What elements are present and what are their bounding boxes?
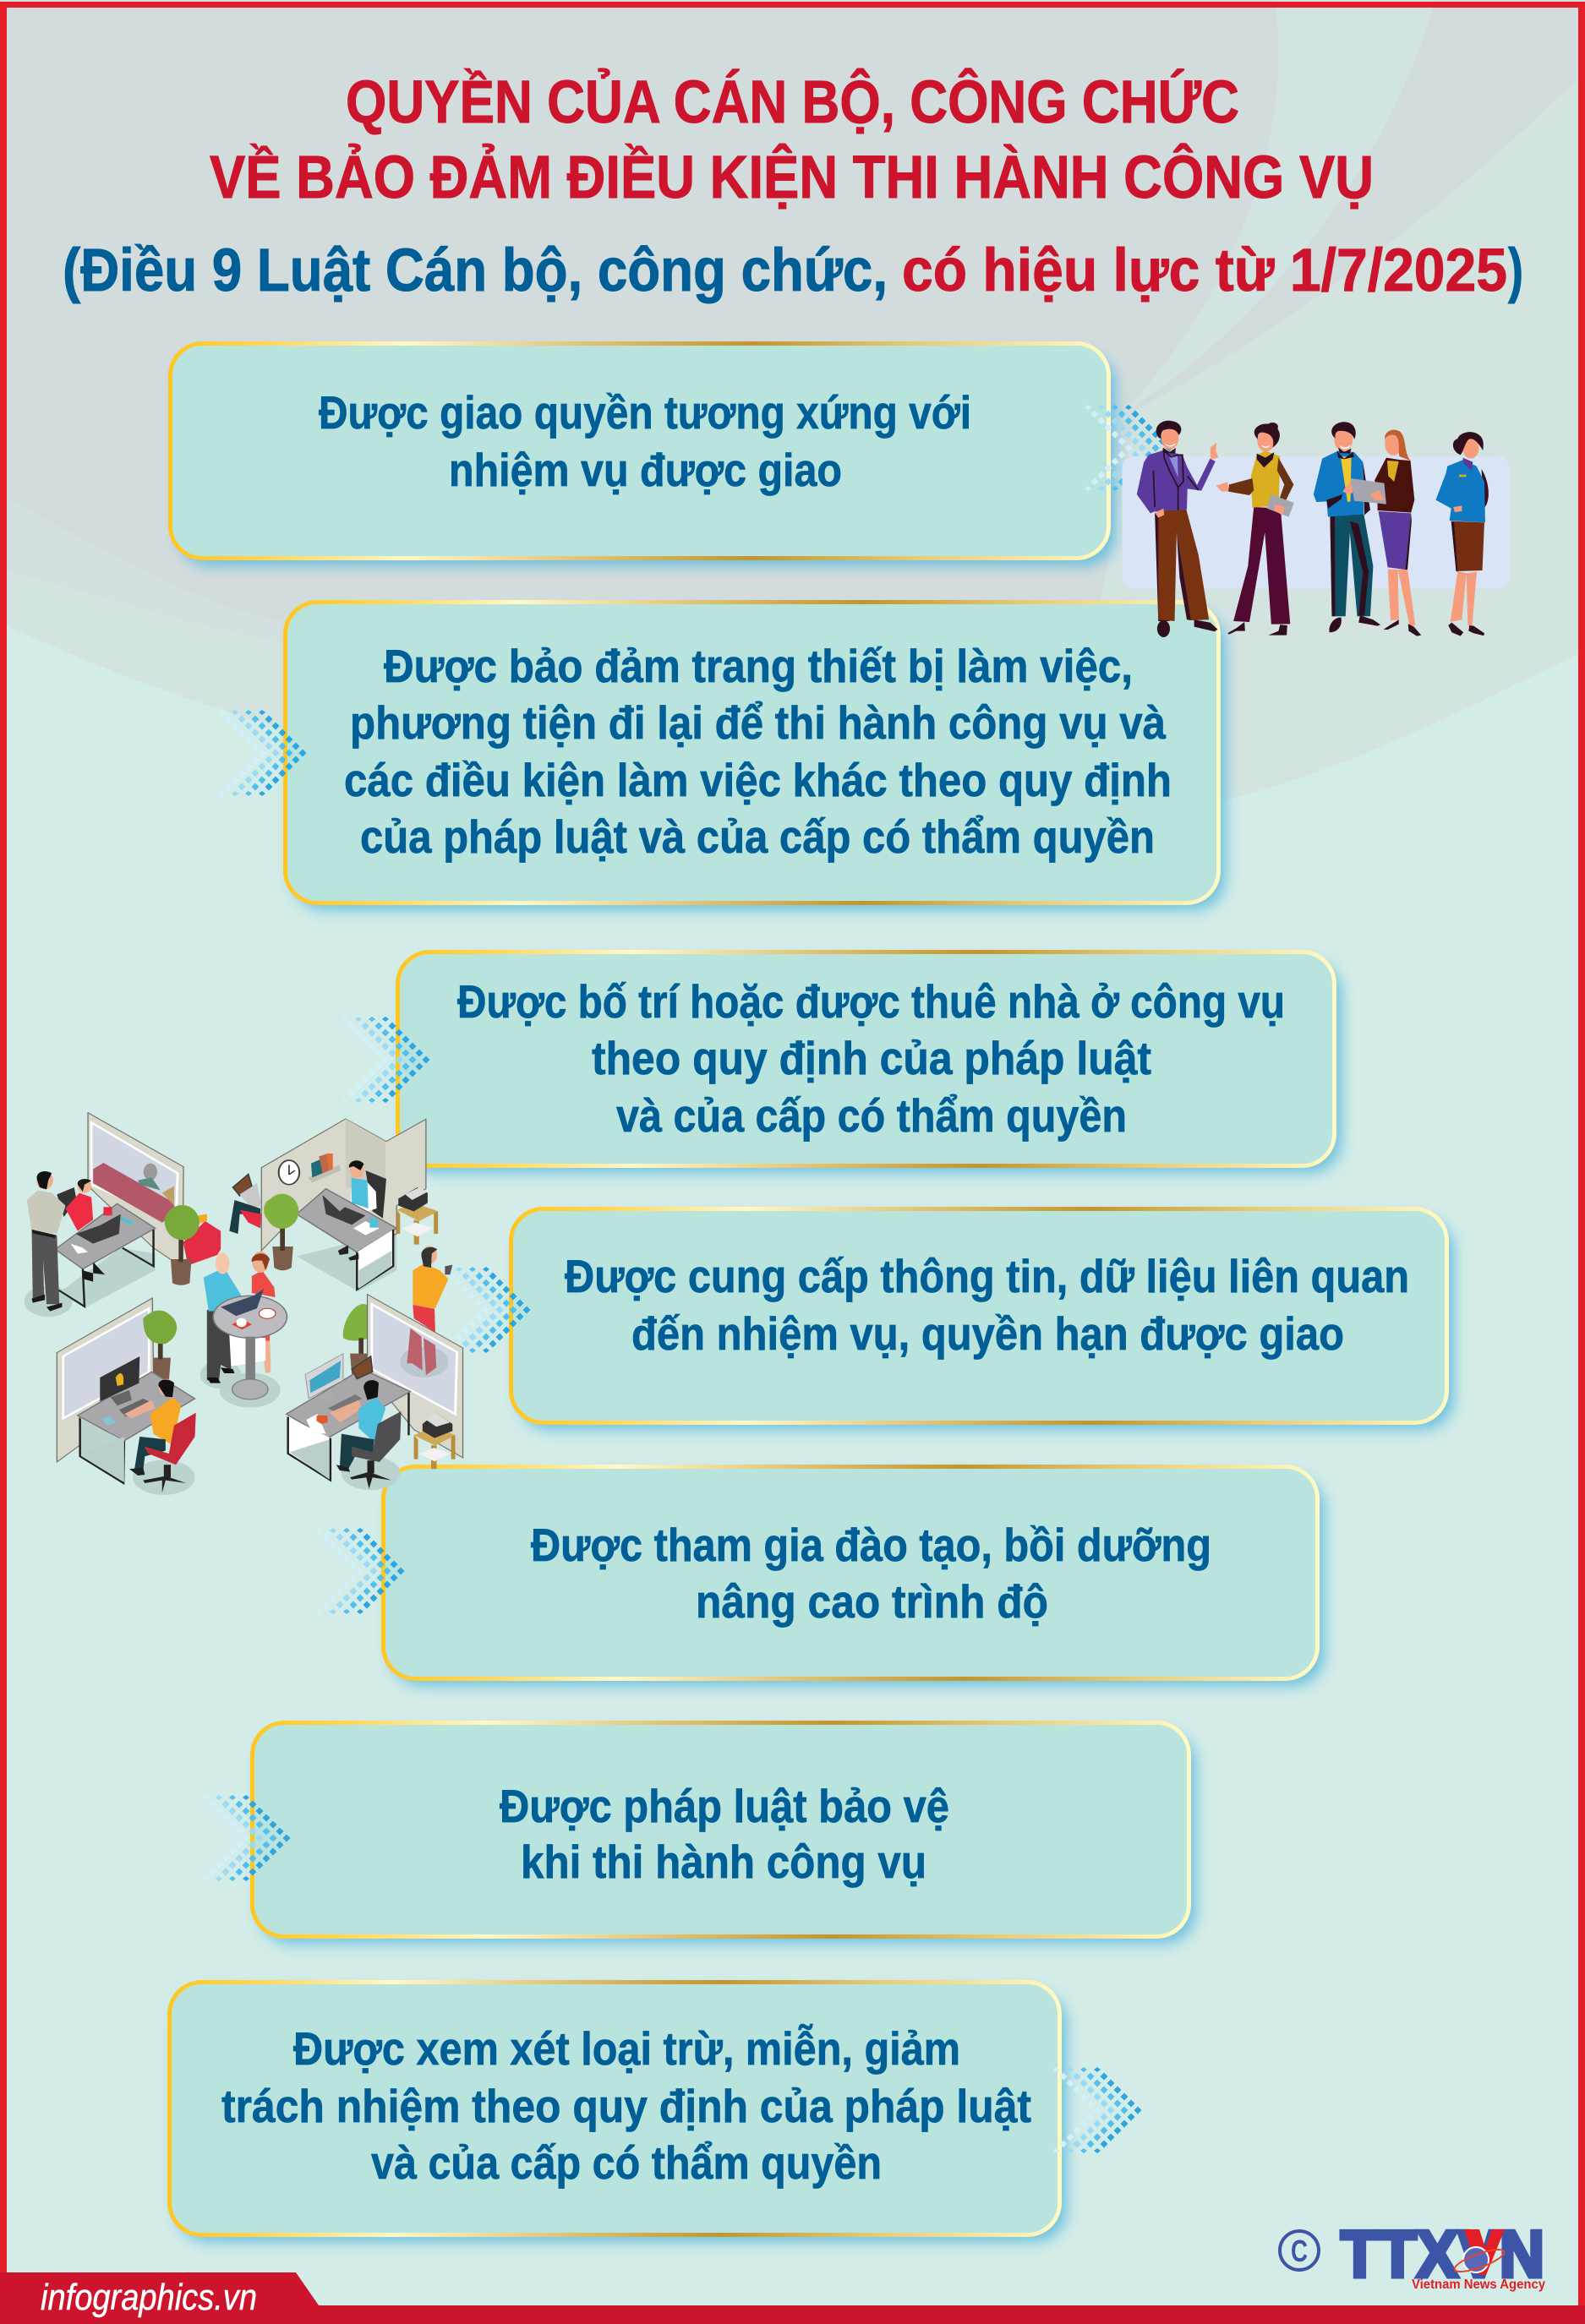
office: center table meeting xyxy=(204,1252,287,1399)
panel: box 6 xyxy=(252,1722,1196,1944)
figure: man in blue jacket xyxy=(1314,422,1380,632)
subtitle: (Điều 9 Luật Cán bộ, công chức, xyxy=(63,237,888,304)
icon: dot chevrons xyxy=(202,405,1173,2153)
panel: box 7: trách nhiệm theo quy định của pháp luật xyxy=(221,2080,1031,2132)
figure: man in purple jacket xyxy=(1137,421,1218,637)
panel: box 1: nhiệm vụ được giao xyxy=(449,444,842,496)
panel: box 1 xyxy=(171,343,1116,566)
panel: box 1: Được giao quyền tương xứng với xyxy=(319,386,971,439)
panel: box 7: Được xem xét loại trừ, miễn, giảm xyxy=(293,2022,960,2075)
figure: woman in blue uniform xyxy=(1435,432,1489,636)
panel: box 4: Được cung cấp thông tin, dữ liệu liên quan xyxy=(565,1250,1409,1302)
logo: TTXVN: C xyxy=(1291,2234,1308,2268)
panel: box 4: đến nhiệm vụ, quyền hạn được giao xyxy=(631,1307,1344,1360)
panel: box 2 xyxy=(286,602,1226,910)
office: shadows xyxy=(25,1231,400,1495)
panel: box 3: Được bố trí hoặc được thuê nhà ở công vụ xyxy=(457,975,1285,1028)
office: bottom-left cubicle xyxy=(57,1298,196,1493)
office: person with phone xyxy=(413,1246,452,1333)
panel: box 7 xyxy=(169,1983,1067,2242)
panel: box 7: và của cấp có thẩm quyền xyxy=(371,2136,882,2189)
panel: box 3 xyxy=(397,952,1342,1173)
footer tab: infographics.vn xyxy=(41,2277,257,2318)
illustration: group of office workers xyxy=(1123,421,1510,637)
figure: woman in yellow vest xyxy=(1216,423,1294,636)
office: bottom-right cubicle xyxy=(287,1295,463,1489)
panel: box 2: của pháp luật và của cấp có thẩm quyền xyxy=(360,810,1155,863)
subtitle: có hiệu lực từ 1/7/2025 xyxy=(902,237,1507,304)
subtitle: ) xyxy=(1508,237,1523,304)
office: top-left cubicle xyxy=(27,1113,221,1312)
panel: box 5: nâng cao trình độ xyxy=(696,1575,1048,1628)
panel: box 5 xyxy=(384,1467,1325,1686)
panel: box 6: Được pháp luật bảo vệ xyxy=(500,1780,949,1832)
panel: box 2: Được bảo đảm trang thiết bị làm việc, xyxy=(384,640,1133,692)
subtitle xyxy=(63,237,1523,304)
panel: box 4 xyxy=(511,1208,1454,1430)
figure: woman in dark blazer xyxy=(1351,430,1421,636)
logo: TTXVN: TTXVN xyxy=(1341,2217,1544,2291)
panel: box 6: khi thi hành công vụ xyxy=(521,1836,926,1888)
footer tab xyxy=(0,2272,319,2324)
panel: box 2: các điều kiện làm việc khác theo quy định xyxy=(344,754,1172,806)
title: VỀ BẢO ĐẢM ĐIỀU KIỆN THI HÀNH CÔNG VỤ xyxy=(210,144,1374,211)
panel: box 3: và của cấp có thẩm quyền xyxy=(616,1089,1127,1142)
panel: box 2: phương tiện đi lại để thi hành công vụ và xyxy=(350,696,1166,749)
panel: box 3: theo quy định của pháp luật xyxy=(592,1032,1151,1084)
logo: TTXVN: Vietnam News Agency xyxy=(1412,2278,1545,2292)
panel: box 5: Được tham gia đào tạo, bồi dưỡng xyxy=(531,1519,1211,1571)
office: top-right cubicle xyxy=(229,1119,438,1290)
illustration: isometric office xyxy=(25,1113,463,1495)
title: QUYỀN CỦA CÁN BỘ, CÔNG CHỨC xyxy=(346,68,1239,136)
title xyxy=(210,68,1374,211)
